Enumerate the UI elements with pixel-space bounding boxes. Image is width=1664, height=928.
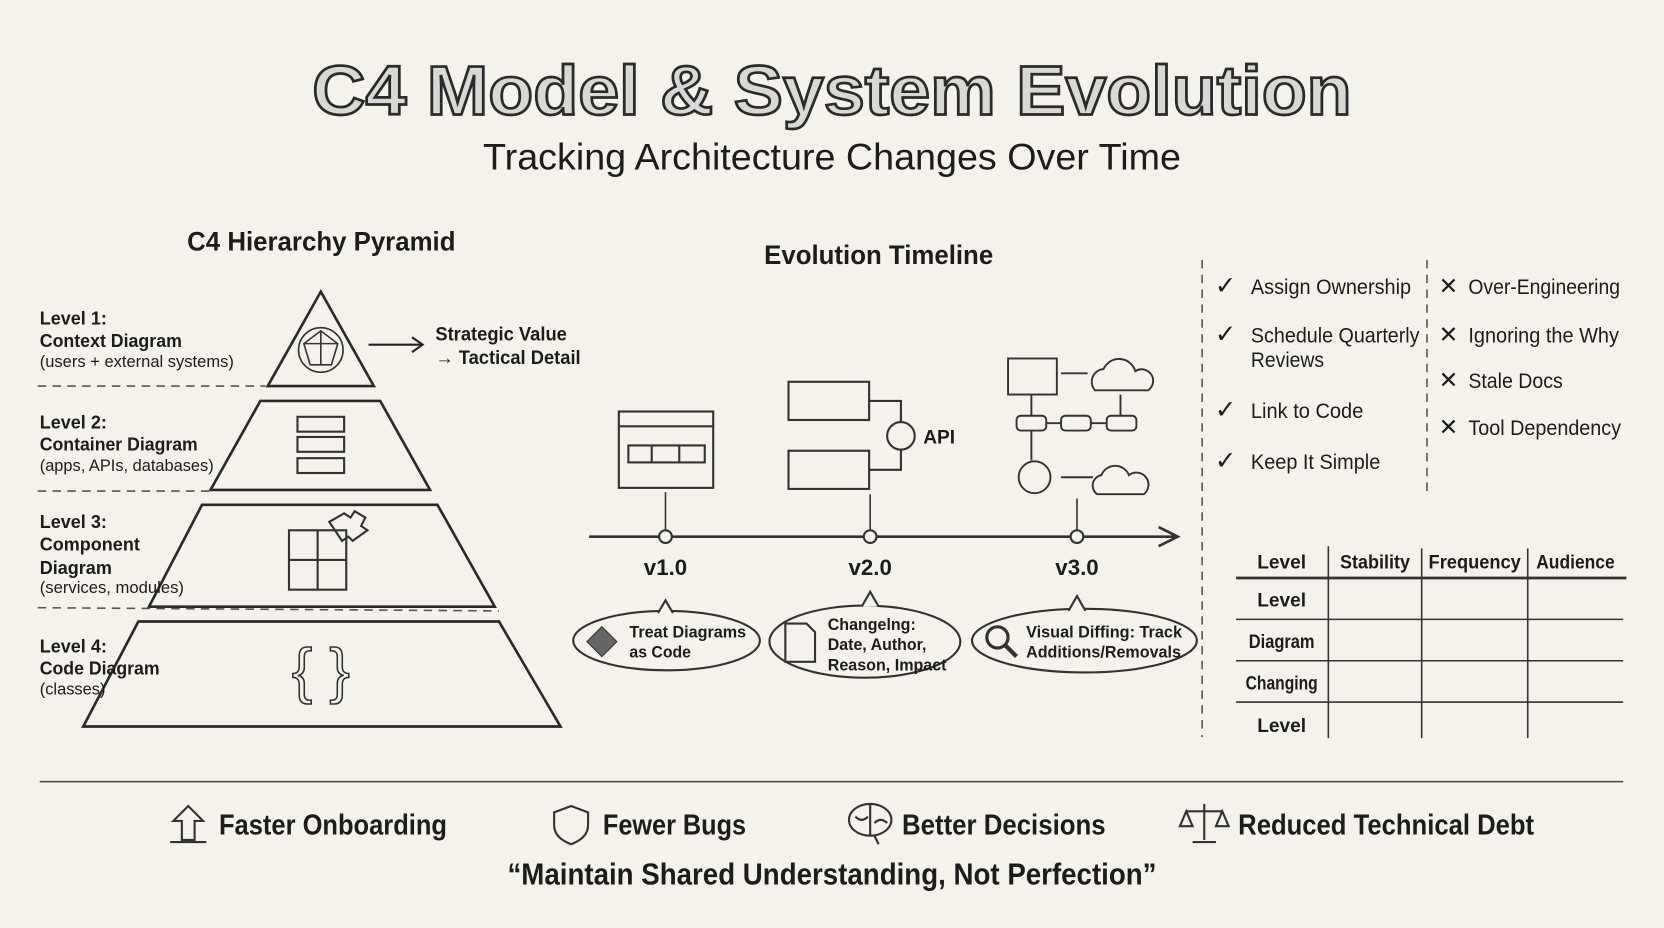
level labels: (services, modules) bbox=[40, 579, 184, 597]
table: Level bbox=[1257, 716, 1306, 737]
do list bbox=[1215, 272, 1420, 475]
level labels: Level 1: bbox=[40, 309, 107, 329]
level labels: Level 2: bbox=[40, 412, 107, 432]
avoid list: Tool Dependency bbox=[1468, 417, 1621, 440]
panel: pyramid bbox=[38, 226, 581, 726]
level labels: Context Diagram bbox=[40, 331, 182, 351]
avoid list: ✕ bbox=[1439, 367, 1458, 393]
version labels: v1.0 bbox=[644, 555, 687, 580]
level labels: Diagram bbox=[40, 558, 112, 578]
panel: timeline bbox=[573, 240, 1197, 678]
level labels: Level 4: bbox=[40, 636, 107, 656]
icon: up arrow bbox=[170, 806, 206, 842]
do list: ✓ bbox=[1215, 447, 1236, 475]
table: Frequency bbox=[1429, 552, 1521, 573]
level labels bbox=[40, 309, 234, 699]
panel: best practices bbox=[1202, 260, 1621, 737]
benefits row: Reduced Technical Debt bbox=[1238, 810, 1535, 842]
avoid list: ✕ bbox=[1439, 273, 1458, 299]
avoid list: Stale Docs bbox=[1468, 370, 1563, 393]
level labels: (users + external systems) bbox=[40, 353, 234, 371]
level labels: Container Diagram bbox=[40, 435, 198, 455]
table: Changing bbox=[1246, 673, 1318, 694]
table: Diagram bbox=[1249, 632, 1315, 653]
callout: v3 bbox=[972, 596, 1197, 672]
level labels: (apps, APIs, databases) bbox=[40, 457, 214, 475]
icon: v2 diagram bbox=[789, 382, 915, 489]
strategic text: Strategic Value bbox=[435, 324, 567, 345]
timeline axis bbox=[589, 527, 1178, 546]
level labels: (classes) bbox=[40, 681, 105, 699]
do list: Link to Code bbox=[1251, 400, 1363, 423]
table: Audience bbox=[1536, 552, 1615, 573]
benefits row: Fewer Bugs bbox=[603, 810, 746, 842]
callout: v2: Changelng: bbox=[828, 615, 916, 634]
icon: v1 diagram bbox=[619, 412, 713, 488]
quote: “Maintain Shared Understanding, Not Perfection” bbox=[507, 857, 1157, 892]
version labels: v3.0 bbox=[1055, 555, 1099, 580]
callout: v1: Treat Diagrams bbox=[629, 622, 746, 641]
callout: v1: as Code bbox=[629, 643, 691, 662]
table: Level bbox=[1257, 591, 1306, 612]
icon: scale bbox=[1180, 804, 1229, 842]
callout: v2 bbox=[769, 592, 960, 678]
panel: pyramid: → Tactical Detail bbox=[435, 348, 581, 369]
do list: ✓ bbox=[1215, 272, 1236, 300]
arrow: strategic bbox=[369, 337, 423, 352]
icon: containers bbox=[297, 417, 344, 473]
pyramid heading: C4 Hierarchy Pyramid bbox=[187, 226, 455, 256]
avoid list: ✕ bbox=[1439, 322, 1458, 348]
avoid list: Ignoring the Why bbox=[1468, 325, 1619, 348]
benefits row: Better Decisions bbox=[902, 810, 1106, 842]
icon: puzzle bbox=[289, 511, 367, 590]
level labels: Level 3: bbox=[40, 512, 107, 532]
do list: Reviews bbox=[1251, 349, 1324, 372]
level labels: Component bbox=[40, 534, 140, 554]
version labels: v2.0 bbox=[849, 555, 892, 580]
callout: v2: Date, Author, bbox=[828, 635, 926, 654]
do list: Keep It Simple bbox=[1251, 451, 1380, 474]
do list: Assign Ownership bbox=[1251, 276, 1411, 299]
do list: Schedule Quarterly bbox=[1251, 325, 1420, 348]
do list: ✓ bbox=[1215, 321, 1236, 349]
icon: v3 diagram bbox=[1008, 358, 1153, 494]
subtitle: Tracking Architecture Changes Over Time bbox=[483, 136, 1181, 178]
timeline heading: Evolution Timeline bbox=[764, 240, 993, 270]
callout: v3: Visual Diffing: Track bbox=[1026, 622, 1183, 641]
panel: timeline: API bbox=[923, 427, 955, 448]
avoid list bbox=[1439, 273, 1621, 440]
table: Level bbox=[1257, 552, 1306, 573]
title: C4 Model & System Evolution bbox=[312, 52, 1352, 130]
level labels: Code Diagram bbox=[40, 659, 160, 679]
icon: brain bbox=[849, 804, 891, 844]
version labels bbox=[644, 555, 1099, 580]
icon: globe bbox=[299, 328, 343, 372]
icon: braces: { } bbox=[292, 636, 350, 705]
avoid list: Over-Engineering bbox=[1468, 276, 1620, 299]
icon: shield bbox=[554, 806, 588, 844]
benefits row: Faster Onboarding bbox=[219, 810, 447, 842]
callout: v1 bbox=[573, 600, 760, 670]
do list: ✓ bbox=[1215, 396, 1236, 424]
avoid list: ✕ bbox=[1439, 414, 1458, 440]
callout: v2: Reason, Impact bbox=[828, 655, 947, 674]
callout: v3: Additions/Removals bbox=[1026, 643, 1181, 662]
benefits row bbox=[170, 804, 1535, 844]
table bbox=[1236, 546, 1626, 738]
table: Stability bbox=[1340, 552, 1410, 573]
